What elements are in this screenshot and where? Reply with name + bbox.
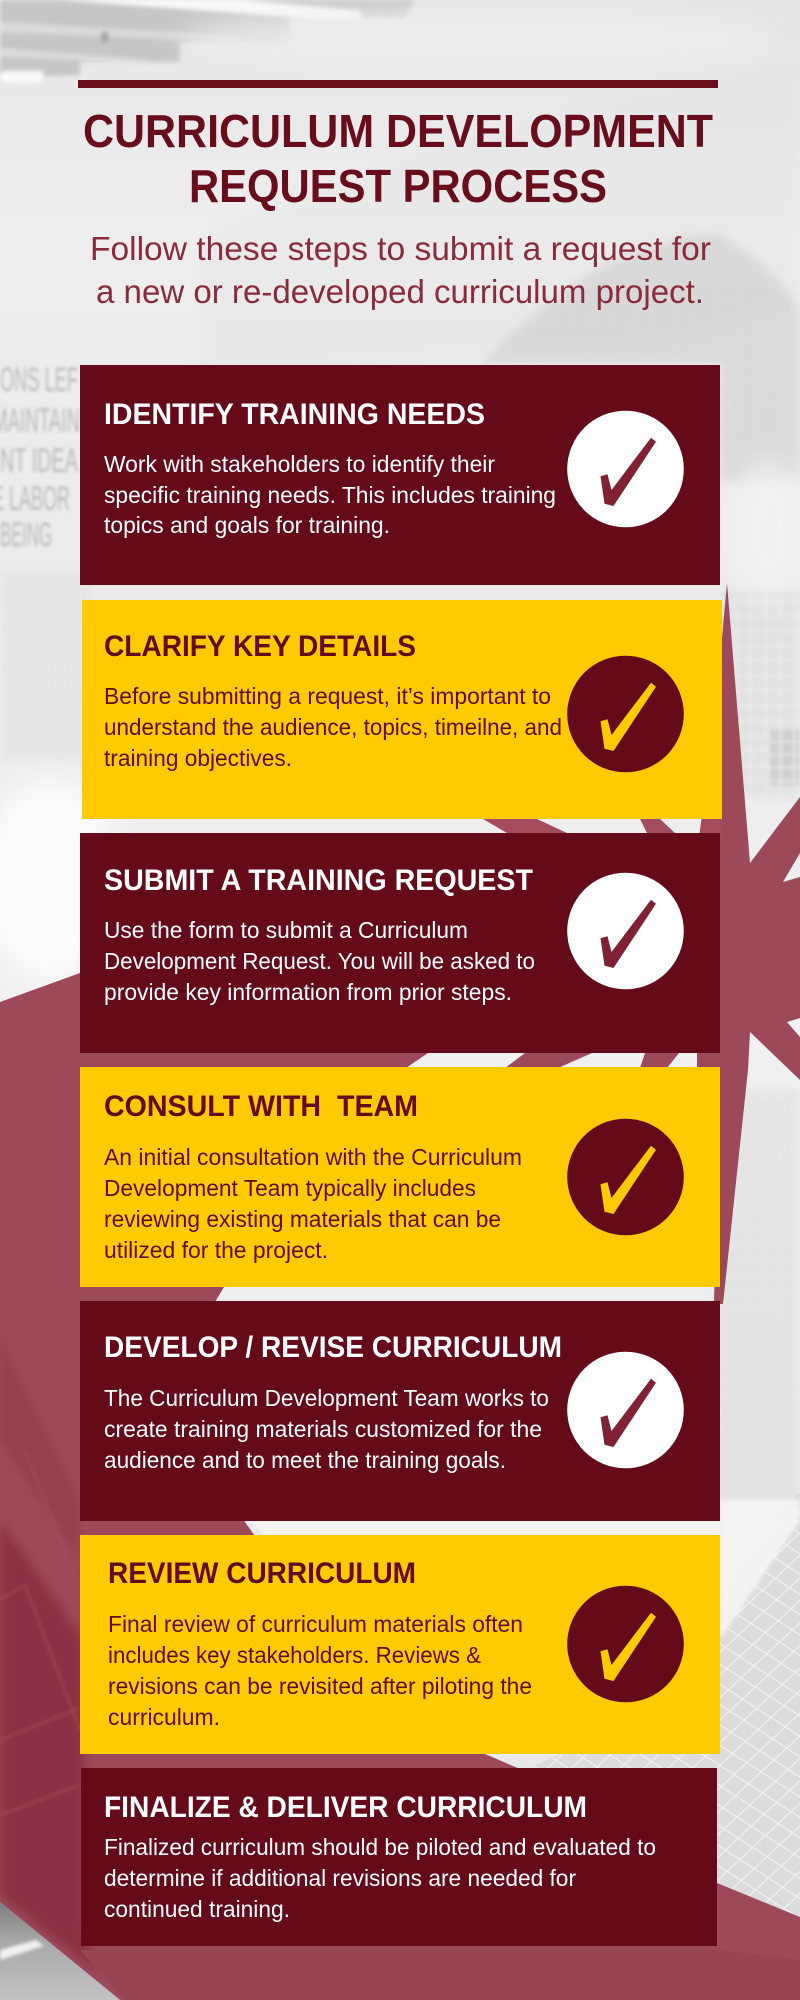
- title: [83, 105, 713, 212]
- blurred wall lettering: ONS LEF: [0, 361, 78, 399]
- heading: FINALIZE & DELIVER CURRICULUM: [104, 1791, 587, 1824]
- faint wall grid: [200, 60, 800, 380]
- body text: provide key information from prior steps.: [104, 979, 512, 1005]
- body text: [104, 1144, 522, 1263]
- icon: check mark: [567, 1119, 684, 1235]
- title: REQUEST PROCESS: [189, 160, 607, 212]
- body text: [104, 683, 562, 771]
- body text: curriculum.: [108, 1704, 220, 1730]
- body text: Development Request. You will be asked to: [104, 948, 535, 974]
- heading: CLARIFY KEY DETAILS: [104, 630, 416, 663]
- panel: consult with team: [80, 1067, 720, 1287]
- blurred wall lettering: BEING: [0, 516, 52, 554]
- blurred wall lettering: [0, 361, 80, 554]
- darker lower-left shading: [0, 1520, 100, 1975]
- body text: Use the form to submit a Curriculum: [104, 917, 468, 943]
- panel: submit a training request: [80, 833, 720, 1053]
- body text: Development Team typically includes: [104, 1175, 476, 1201]
- heading: CONSULT WITH TEAM: [104, 1090, 418, 1123]
- right margin wall grid: [715, 1090, 800, 1520]
- body text: [104, 451, 556, 538]
- panel: identify training needs: [80, 365, 720, 585]
- body text: revisions can be revisited after piloting the: [108, 1673, 532, 1699]
- heading: IDENTIFY TRAINING NEEDS: [104, 398, 485, 431]
- icon: check mark: [567, 411, 684, 527]
- body text: An initial consultation with the Curriculum: [104, 1144, 522, 1170]
- subtitle: a new or re-developed curriculum project.: [96, 274, 704, 311]
- body text: Final review of curriculum materials often: [108, 1611, 523, 1637]
- icon: check mark: [567, 1352, 684, 1468]
- body text: Finalized curriculum should be piloted and evaluated to: [104, 1834, 656, 1860]
- crimson overlay shape: [0, 583, 800, 2000]
- body text: reviewing existing materials that can be: [104, 1206, 501, 1232]
- body text: training objectives.: [104, 745, 292, 771]
- body text: continued training.: [104, 1896, 290, 1922]
- body text: utilized for the project.: [104, 1237, 328, 1263]
- panel: finalize and deliver curriculum: [81, 1768, 717, 1946]
- panel: review curriculum: [80, 1535, 720, 1754]
- lower right diamond grid: [715, 1490, 800, 1925]
- body text: create training materials customized for the: [104, 1416, 542, 1442]
- body text: The Curriculum Development Team works to: [104, 1385, 549, 1411]
- body text: Before submitting a request, it’s important to: [104, 683, 551, 709]
- ceiling fixtures: [0, 0, 415, 82]
- icon: check mark: [567, 873, 684, 989]
- body text: Work with stakeholders to identify their: [104, 451, 495, 477]
- panel: clarify key details: [82, 600, 722, 819]
- body text: [108, 1611, 532, 1730]
- heading: REVIEW CURRICULUM: [108, 1557, 416, 1590]
- body text: [104, 917, 535, 1005]
- heading: SUBMIT A TRAINING REQUEST: [104, 864, 533, 897]
- body text: includes key stakeholders. Reviews &: [108, 1642, 481, 1668]
- icon: check mark: [567, 656, 684, 772]
- body text: audience and to meet the training goals.: [104, 1447, 506, 1473]
- subtitle: Follow these steps to submit a request for: [90, 231, 711, 268]
- body text: topics and goals for training.: [104, 512, 390, 538]
- body text: specific training needs. This includes training: [104, 482, 556, 508]
- subtitle: [90, 231, 711, 311]
- globe on the wall: [480, 235, 800, 480]
- title rule: [78, 80, 718, 88]
- body text: [104, 1834, 656, 1922]
- grey floor corner: [0, 1902, 120, 2000]
- body text: [104, 1385, 549, 1473]
- star burst spikes: [714, 583, 800, 1304]
- panel: develop / revise curriculum: [80, 1301, 720, 1521]
- title: CURRICULUM DEVELOPMENT: [83, 105, 713, 157]
- blurred wall lettering: NT IDEA: [0, 442, 78, 480]
- body text: determine if additional revisions are needed for: [104, 1865, 576, 1891]
- heading: DEVELOP / REVISE CURRICULUM: [104, 1331, 562, 1364]
- body text: understand the audience, topics, timeilne, and: [104, 714, 562, 740]
- icon: check mark: [567, 1586, 684, 1702]
